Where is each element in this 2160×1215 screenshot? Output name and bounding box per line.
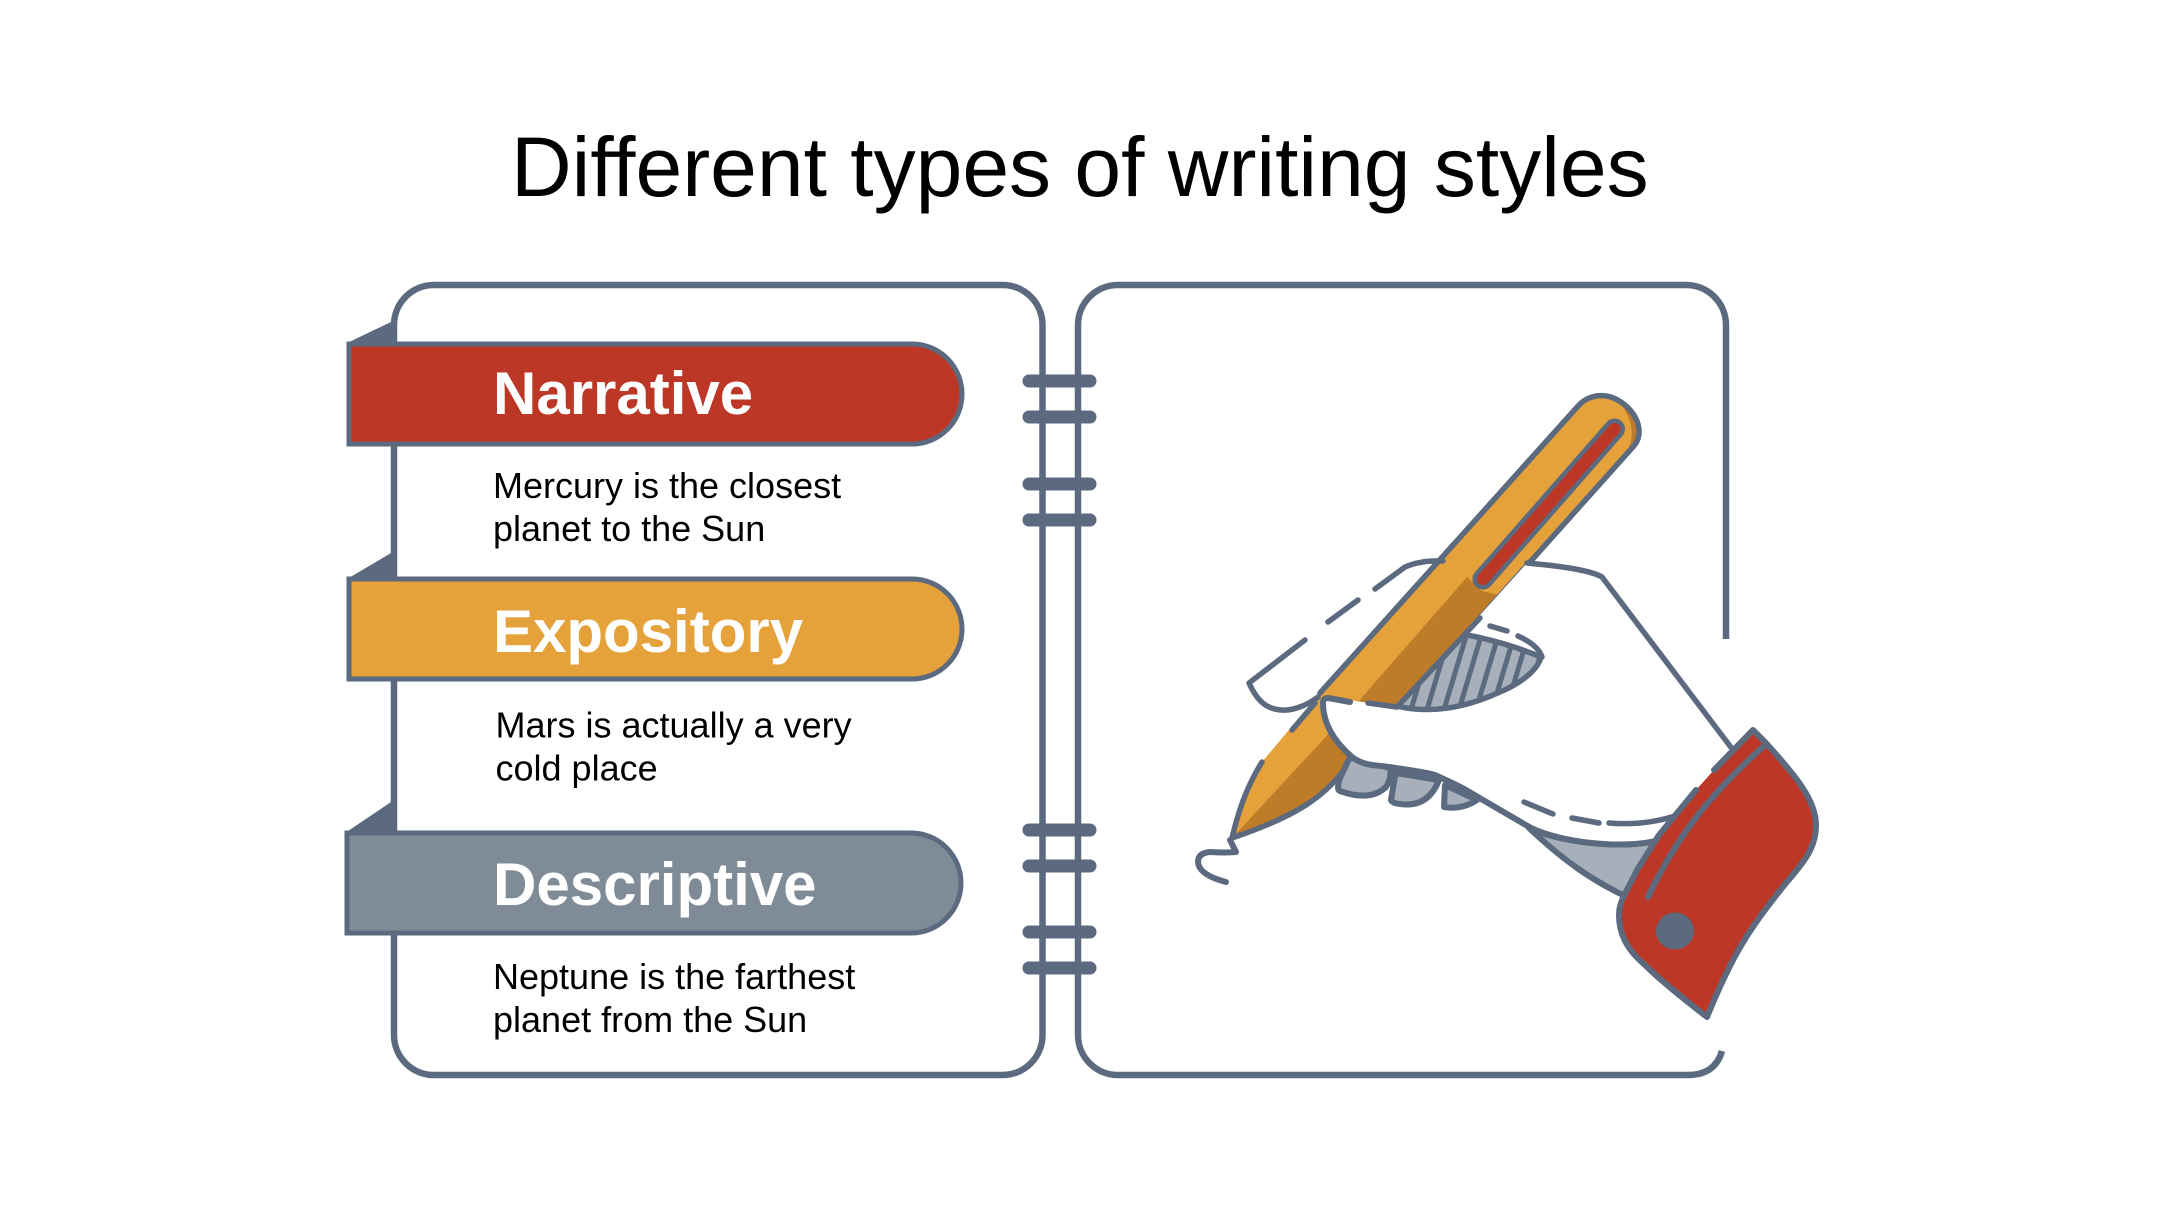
icon: wrist shadow	[1529, 828, 1660, 897]
icon: finger shadows	[1338, 757, 1477, 808]
text: Descriptive description: Neptune is the farthest	[493, 956, 855, 997]
ribbon: Descriptive: Descriptive	[493, 851, 816, 918]
ribbon: Expository	[347, 553, 962, 679]
title: Different types of writing styles	[511, 120, 1649, 214]
ribbon: Narrative	[347, 322, 962, 444]
ribbon: Descriptive	[345, 802, 961, 933]
notebook	[394, 285, 1726, 1075]
icon: cuff button	[1656, 912, 1694, 950]
text: Narrative description: Mercury is the closest	[493, 465, 841, 506]
text: Descriptive description: planet from the Sun	[493, 999, 807, 1040]
illustration: hand writing with pen	[1198, 396, 1816, 1017]
icon: palm hatching	[1395, 615, 1544, 712]
ribbon: Narrative: Narrative	[493, 360, 753, 427]
left page	[394, 285, 1042, 1075]
text: Expository description: cold place	[496, 748, 658, 788]
icon: pen	[1232, 396, 1639, 838]
icon: pen scribble	[1198, 840, 1236, 882]
ribbon: Expository: Expository	[493, 598, 804, 665]
text: Narrative description: planet to the Sun	[493, 508, 765, 549]
spiral rings	[1029, 381, 1090, 968]
right page	[1078, 285, 1726, 1075]
icon: hand	[1249, 561, 1733, 844]
text: Expository description: Mars is actually a very	[496, 704, 852, 746]
icon: shirt cuff	[1619, 730, 1816, 1017]
